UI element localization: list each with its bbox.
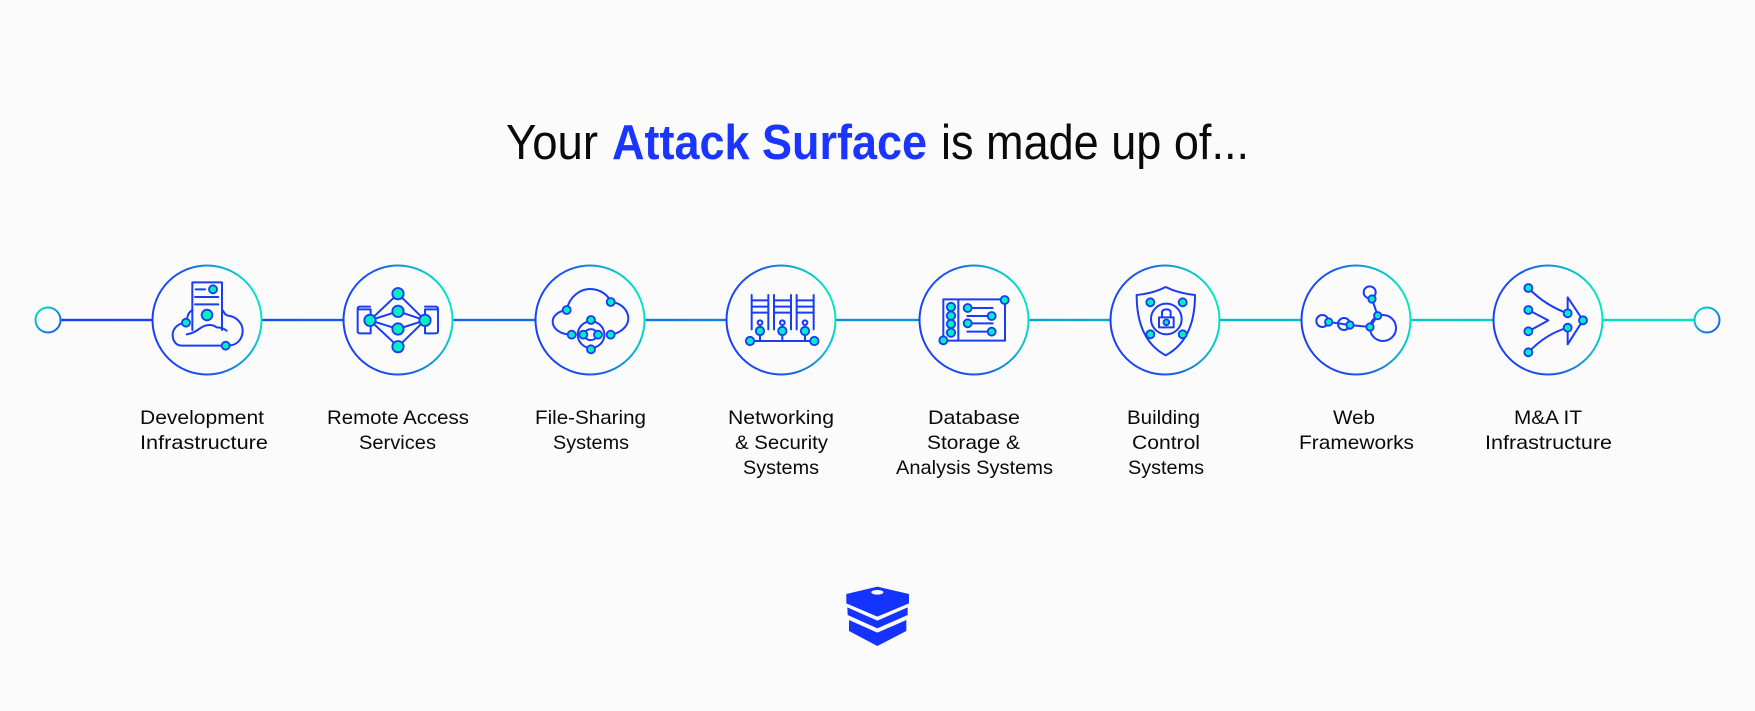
label: Remote Access xyxy=(327,407,469,429)
step 5: database storage and analysis systems xyxy=(896,266,1053,479)
label: Infrastructure xyxy=(1485,432,1612,454)
icon: network xyxy=(358,288,438,352)
step 8: M&A IT infrastructure xyxy=(1485,266,1612,454)
title: Attack Surface xyxy=(612,116,927,170)
label: Database xyxy=(928,407,1020,429)
label: Systems xyxy=(553,432,629,454)
label: File-Sharing xyxy=(535,407,646,429)
icon: database panel xyxy=(939,296,1009,344)
icon: cloud and document xyxy=(173,282,243,350)
ring 1 xyxy=(152,266,262,374)
ring 4 xyxy=(726,266,836,374)
label xyxy=(1127,407,1204,479)
title: is made up of... xyxy=(941,116,1249,170)
label: Development xyxy=(140,407,265,429)
step 6: building control systems xyxy=(1110,266,1220,479)
step 4: networking and security systems xyxy=(726,266,836,479)
icon: servers xyxy=(746,295,818,345)
logo: stacked layers xyxy=(846,587,909,646)
label: & Security xyxy=(735,432,828,454)
icon: merging arrow xyxy=(1524,284,1587,356)
icon: shield with lock xyxy=(1137,287,1195,355)
label xyxy=(896,407,1053,479)
step 3: file-sharing systems xyxy=(535,266,646,454)
icon: cloud sharing xyxy=(553,289,628,353)
label xyxy=(728,407,834,479)
label: Web xyxy=(1333,407,1375,429)
ring 3 xyxy=(536,266,644,374)
ring 6 xyxy=(1110,266,1220,374)
label: Building xyxy=(1127,407,1200,429)
title: Your xyxy=(506,116,598,170)
label: Infrastructure xyxy=(140,432,268,454)
title xyxy=(506,116,1249,170)
ring 2 xyxy=(344,266,452,374)
ring 5 xyxy=(920,266,1028,374)
timeline line xyxy=(60,319,1695,321)
label xyxy=(1485,407,1612,454)
label: Analysis Systems xyxy=(896,457,1053,479)
label: Services xyxy=(359,432,436,454)
icon: node graph xyxy=(1316,286,1396,341)
start node xyxy=(36,308,60,332)
label: M&A IT xyxy=(1514,407,1582,429)
step 7: web frameworks xyxy=(1299,266,1414,454)
label: Control xyxy=(1132,432,1200,454)
label: Storage & xyxy=(927,432,1020,454)
label xyxy=(1299,407,1414,454)
label: Systems xyxy=(743,457,819,479)
label xyxy=(535,407,646,454)
ring 8 xyxy=(1494,266,1602,374)
step 2: remote access services xyxy=(327,266,469,454)
label xyxy=(327,407,469,454)
label xyxy=(140,407,268,454)
step 1: development infrastructure xyxy=(140,266,268,454)
label: Frameworks xyxy=(1299,432,1414,454)
ring 7 xyxy=(1302,266,1410,374)
label: Systems xyxy=(1128,457,1204,479)
end node xyxy=(1694,308,1720,332)
label: Networking xyxy=(728,407,834,429)
